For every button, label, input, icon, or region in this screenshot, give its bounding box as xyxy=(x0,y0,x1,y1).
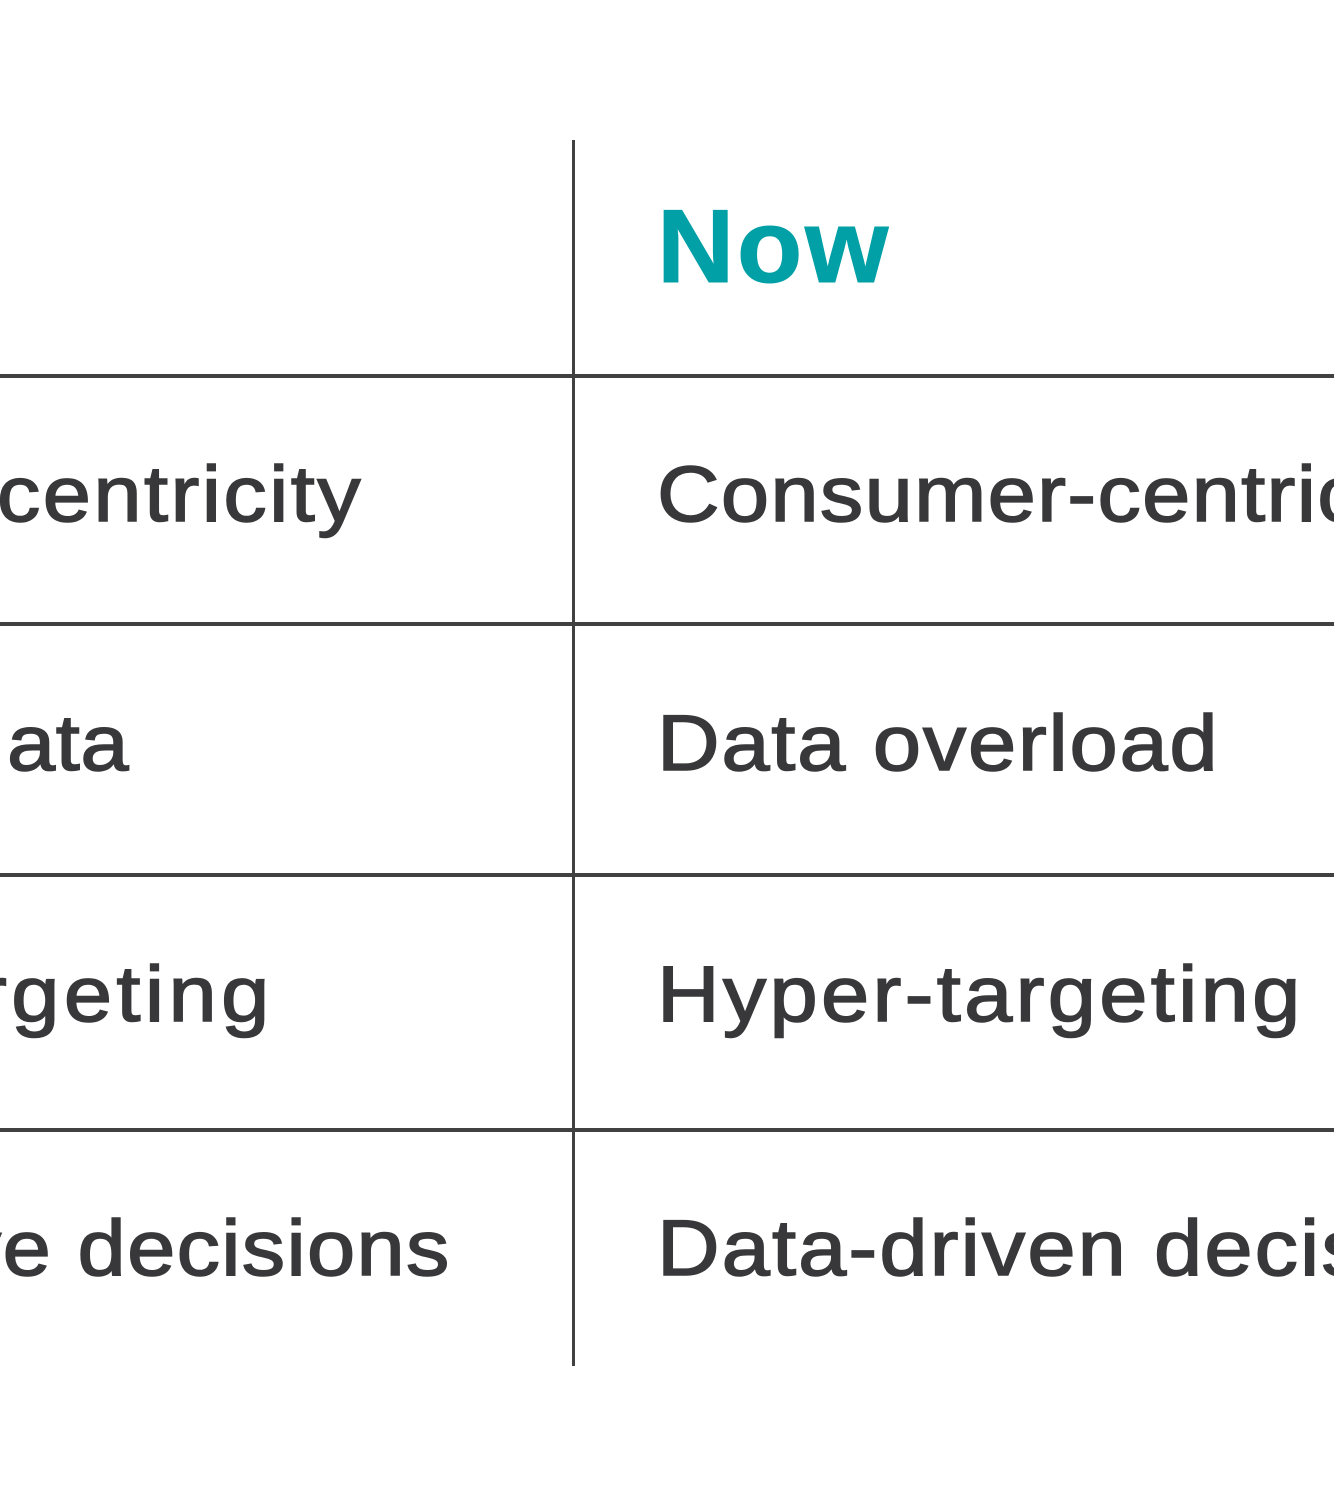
heading: Now: Now xyxy=(657,189,891,305)
row divider 3 xyxy=(0,873,1334,877)
row divider 2 xyxy=(0,622,1334,626)
left cell: data: ata xyxy=(7,698,129,787)
vertical column divider xyxy=(572,140,575,1366)
row divider 4 xyxy=(0,1128,1334,1132)
left cell: centricity: centricity xyxy=(0,449,363,538)
row divider 1 xyxy=(0,374,1334,378)
right cell: Hyper-targeting: Hyper-targeting xyxy=(657,949,1304,1038)
right cell: Data overload: Data overload xyxy=(657,698,1219,787)
